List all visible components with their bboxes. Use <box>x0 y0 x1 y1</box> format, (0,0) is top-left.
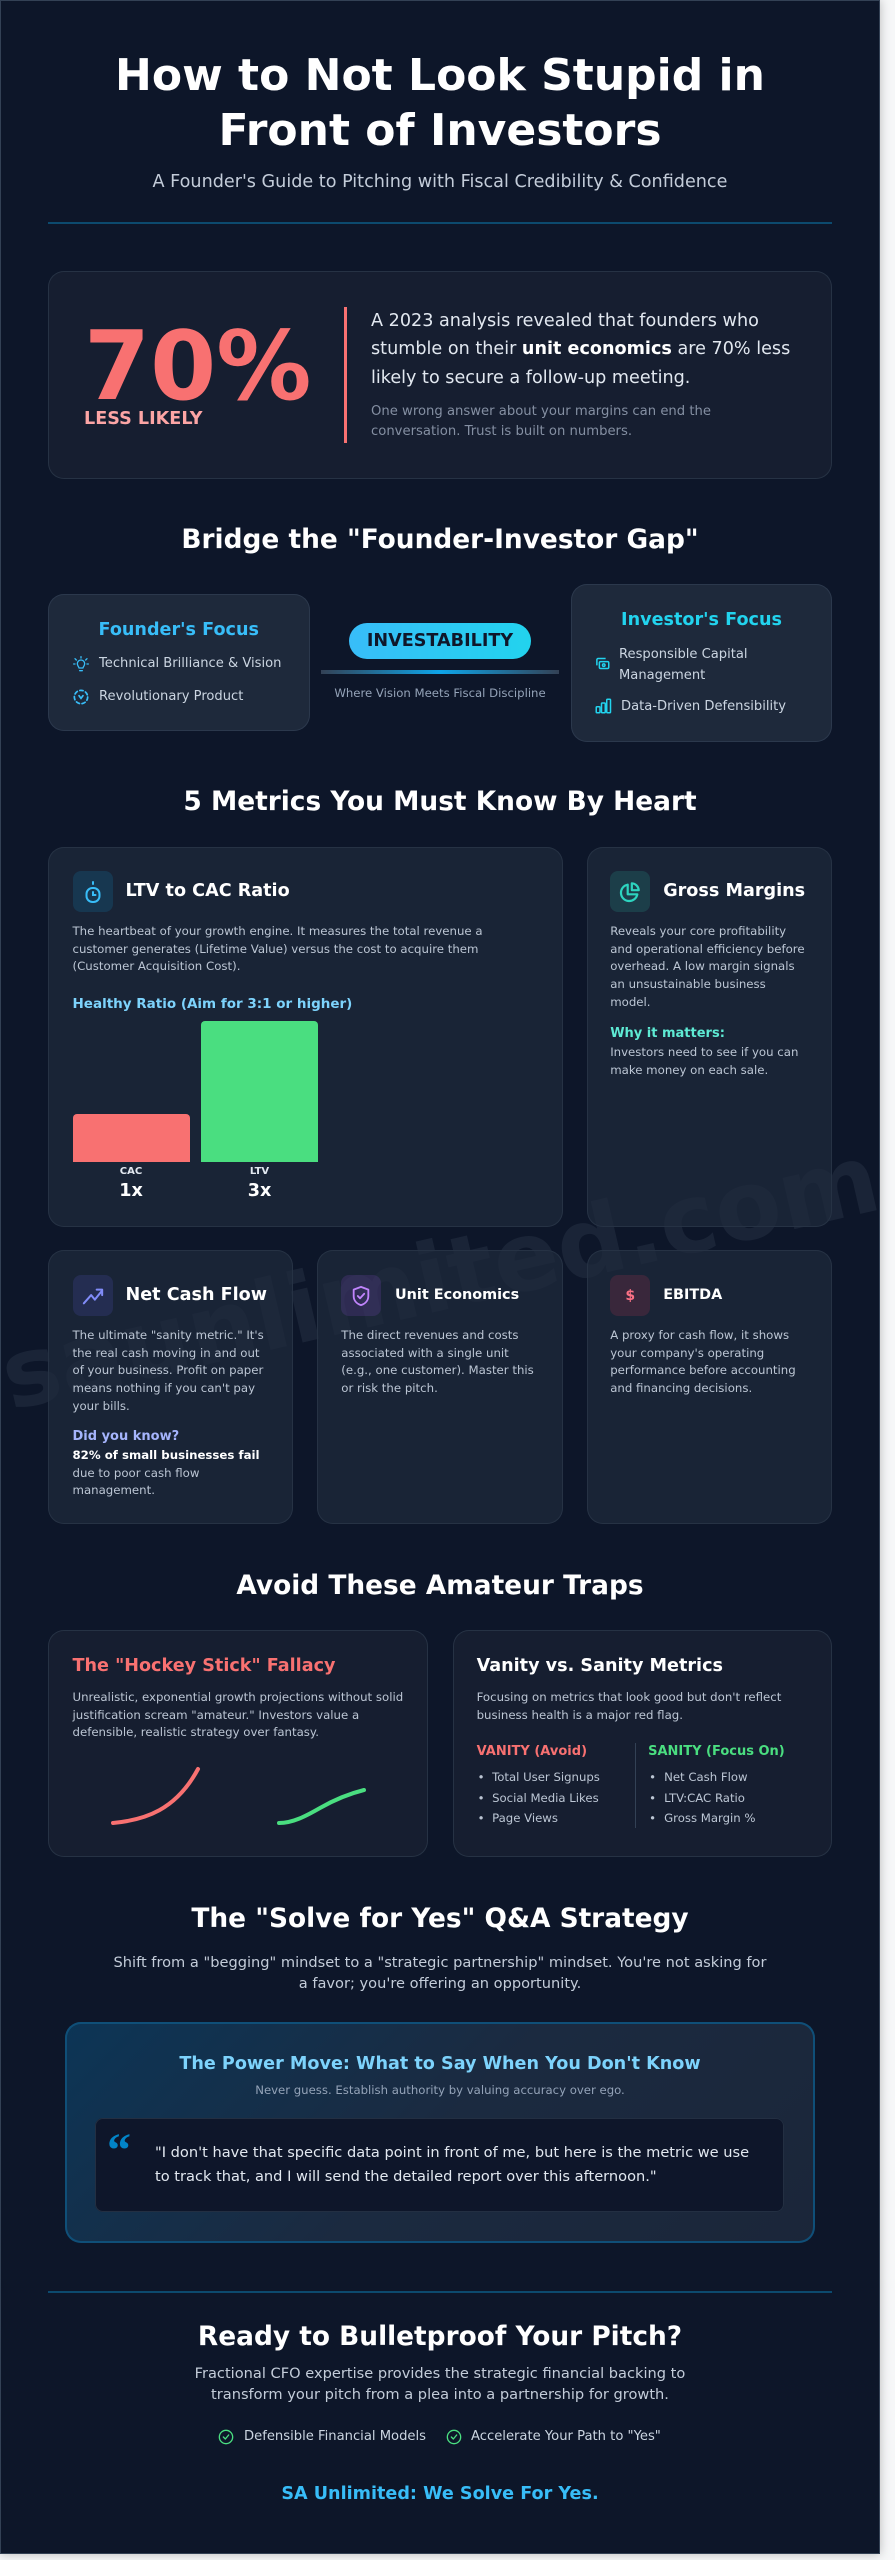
chart: growth curves <box>111 1766 366 1825</box>
bar: LTV <box>201 1021 318 1162</box>
icon: check two <box>446 2430 462 2444</box>
investor item: data-driven: Data-Driven Defensibility <box>621 699 786 714</box>
callout text: make money on each sale. <box>610 1063 768 1077</box>
panel: investor's focus <box>571 584 832 742</box>
subtitle: A Founder's Guide to Pitching with Fiscal Credibility & Confidence <box>153 172 727 192</box>
metric description: or risk the pitch. <box>341 1381 438 1395</box>
icon: dollar sign: $ <box>625 1288 635 1304</box>
metric description: your bills. <box>72 1399 130 1413</box>
metric description <box>341 1328 534 1395</box>
metric description: associated with a single unit <box>341 1346 509 1360</box>
investor heading: Investor's Focus <box>621 610 782 630</box>
benefit two: Accelerate Your Path to "Yes" <box>471 2429 661 2444</box>
metric description: overhead. A low margin signals <box>610 959 795 973</box>
panel: net cash flow <box>48 1250 293 1524</box>
panel: 70% statistic <box>48 271 832 479</box>
trap title: The "Hockey Stick" Fallacy <box>72 1656 335 1676</box>
brand line: SA Unlimited: We Solve For Yes. <box>281 2484 599 2504</box>
metric description <box>72 924 483 973</box>
curve: realistic growth <box>279 1790 364 1823</box>
vanity list: Page Views <box>492 1811 558 1825</box>
bar: CAC <box>72 1114 190 1162</box>
power move title: The Power Move: What to Say When You Don't Know <box>179 2054 701 2074</box>
callout text <box>72 1448 260 1497</box>
metric title: Net Cash Flow <box>126 1285 267 1305</box>
icon: shield check <box>341 1275 381 1316</box>
metric description <box>610 1328 796 1395</box>
metric description: customer generates (Lifetime Value) versus the cost to acquire them <box>72 942 478 956</box>
trap description <box>477 1690 782 1722</box>
panel: EBITDA <box>587 1250 832 1524</box>
vanity list: • <box>478 1770 484 1784</box>
heading: bridge the gap: Bridge the "Founder-Investor Gap" <box>181 524 699 555</box>
benefit one: Defensible Financial Models <box>244 2429 426 2444</box>
metric description: The ultimate "sanity metric." It's <box>72 1328 264 1342</box>
vanity list <box>478 1770 600 1825</box>
metric description: Reveals your core profitability <box>610 924 786 938</box>
icon: quotation mark: “ <box>107 2124 131 2177</box>
header <box>115 50 765 192</box>
quote text <box>155 2144 749 2185</box>
metric title: LTV to CAC Ratio <box>126 881 290 901</box>
founder item: technical brilliance: Technical Brilliance & Vision <box>99 656 281 671</box>
investor item: responsible capital <box>619 646 748 682</box>
metric description: (Customer Acquisition Cost). <box>72 959 240 973</box>
heading: amateur traps: Avoid These Amateur Traps <box>236 1570 644 1601</box>
power move subtitle: Never guess. Establish authority by valuing accuracy over ego. <box>255 2083 625 2097</box>
metric description: A proxy for cash flow, it shows <box>610 1328 789 1342</box>
CTA text: Fractional CFO expertise provides the strategic financial backing to <box>195 2365 685 2382</box>
section intro <box>114 1954 766 1992</box>
metric description: model. <box>610 995 651 1009</box>
metric description: your company's operating <box>610 1346 764 1360</box>
investability pill <box>349 623 531 659</box>
investor item: responsible capital: Management <box>619 668 705 682</box>
icon: dollar sign <box>610 1275 650 1316</box>
trap description: justification scream "amateur." Investors value a <box>72 1708 359 1722</box>
sanity list: • <box>649 1770 656 1784</box>
founder heading: Founder's Focus <box>99 620 259 640</box>
trap description <box>72 1690 403 1739</box>
curve: hockey stick <box>113 1769 198 1823</box>
trap description: defensible, realistic strategy over fantasy. <box>72 1725 319 1739</box>
sanity list: Gross Margin % <box>664 1811 755 1825</box>
heading: 5 metrics: 5 Metrics You Must Know By Heart <box>183 786 697 817</box>
vanity list: • <box>478 1811 484 1825</box>
stat label: LESS LIKELY <box>84 409 203 429</box>
sanity list: LTV:CAC Ratio <box>664 1790 745 1804</box>
title <box>115 50 765 156</box>
CTA text: transform your pitch from a plea into a partnership for growth. <box>211 2386 669 2403</box>
metric description: The heartbeat of your growth engine. It measures the total revenue a <box>72 924 483 938</box>
sanity column <box>648 1744 785 1825</box>
founder item: revolutionary product: Revolutionary Product <box>99 689 243 704</box>
stat footnote: conversation. Trust is built on numbers. <box>371 424 632 439</box>
icon: cash stack <box>596 658 610 670</box>
quote text: "I don't have that specific data point in front of me, but here is the metric we use <box>155 2144 749 2161</box>
section intro: Shift from a "begging" mindset to a "strategic partnership" mindset. You're not asking for <box>114 1954 766 1971</box>
callout text: Investors need to see if you can <box>610 1045 798 1059</box>
icon: stopwatch <box>72 871 112 912</box>
trap title: Vanity vs. Sanity Metrics <box>477 1656 723 1676</box>
investability bridge <box>321 623 559 700</box>
stat footnote: One wrong answer about your margins can end the <box>371 404 711 419</box>
vanity list: Social Media Likes <box>492 1790 599 1804</box>
vanity column <box>476 1744 600 1825</box>
metric title: EBITDA <box>663 1287 722 1303</box>
CTA heading: Ready to Bulletproof Your Pitch? <box>198 2321 682 2352</box>
panel: vanity vs sanity <box>453 1630 832 1857</box>
icon: lightbulb <box>73 656 89 672</box>
panel: LTV to CAC <box>48 847 563 1227</box>
watermark: saunlimited.com <box>0 1122 880 1432</box>
panel: founder's focus <box>48 594 310 731</box>
sanity list <box>649 1770 755 1825</box>
quote text: to track that, and I will send the detailed report over this afternoon." <box>155 2168 657 2185</box>
sanity list: • <box>649 1811 656 1825</box>
call to action <box>195 2321 685 2504</box>
metric description <box>610 924 805 1009</box>
stat explanation: stumble on their unit economics are 70% less <box>371 339 790 359</box>
stat explanation: likely to secure a follow-up meeting. <box>371 368 690 388</box>
metric title: Unit Economics <box>395 1287 519 1303</box>
trap description: business health is a major red flag. <box>477 1708 683 1722</box>
CTA text <box>195 2365 685 2403</box>
panel: hockey stick fallacy <box>48 1630 428 1857</box>
vanity list: • <box>478 1790 484 1804</box>
heading: solve for yes: The "Solve for Yes" Q&A Strategy <box>191 1903 689 1934</box>
vanity heading: VANITY (Avoid) <box>477 1744 587 1759</box>
title: How to Not Look Stupid in <box>115 50 765 101</box>
title: Front of Investors <box>218 105 662 156</box>
callout text: due to poor cash flow <box>72 1466 199 1480</box>
stat explanation <box>371 311 790 388</box>
trap description: Focusing on metrics that look good but don't reflect <box>477 1690 781 1704</box>
investability pill: INVESTABILITY <box>367 631 513 651</box>
LTV label: LTV <box>250 1166 269 1177</box>
callout text: management. <box>72 1483 155 1497</box>
metric description: The direct revenues and costs <box>341 1328 519 1342</box>
metric description: and financing decisions. <box>610 1381 752 1395</box>
bar chart <box>73 1021 318 1201</box>
metric title: Gross Margins <box>663 881 805 901</box>
metric description: and operational efficiency before <box>610 942 805 956</box>
callout heading: Why it matters: <box>610 1026 725 1041</box>
chart label: Healthy Ratio (Aim for 3:1 or higher) <box>72 996 352 1012</box>
callout text <box>610 1045 798 1077</box>
callout heading: Did you know? <box>72 1429 179 1444</box>
icon: pie chart <box>610 871 650 912</box>
bridge caption: Where Vision Meets Fiscal Discipline <box>334 686 546 700</box>
panel: gross margins <box>587 847 832 1227</box>
metric description: performance before accounting <box>610 1363 796 1377</box>
icon: trending up <box>72 1275 112 1316</box>
icon: bar chart <box>596 698 612 714</box>
trap description: Unrealistic, exponential growth projections without solid <box>72 1690 403 1704</box>
big number: 70% <box>84 312 311 422</box>
panel: power move <box>65 2022 815 2243</box>
quote box <box>95 2118 784 2212</box>
sanity list: • <box>649 1790 656 1804</box>
callout text: 82% of small businesses fail <box>72 1448 260 1462</box>
metric description: of your business. Profit on paper <box>72 1363 263 1377</box>
LTV value: 3x <box>248 1181 271 1201</box>
panel: unit economics <box>317 1250 563 1524</box>
metric description: (e.g., one customer). Master this <box>341 1363 534 1377</box>
metric description: means nothing if you can't pay <box>72 1381 255 1395</box>
CAC label: CAC <box>120 1166 142 1177</box>
stat explanation: A 2023 analysis revealed that founders who <box>371 311 759 331</box>
icon: check one <box>218 2430 234 2444</box>
metric description: the real cash moving in and out <box>72 1346 260 1360</box>
metric description <box>72 1328 264 1413</box>
stat footnote <box>371 404 711 439</box>
investor item: responsible capital: Responsible Capital <box>619 646 748 662</box>
section intro: a favor; you're offering an opportunity. <box>299 1975 581 1992</box>
CAC value: 1x <box>119 1181 143 1201</box>
icon: dashed product circle <box>73 690 88 704</box>
sanity heading: SANITY (Focus On) <box>648 1744 785 1759</box>
metric description: an unsustainable business <box>610 977 766 991</box>
sanity list: Net Cash Flow <box>664 1770 748 1784</box>
vanity list: Total User Signups <box>492 1770 600 1784</box>
